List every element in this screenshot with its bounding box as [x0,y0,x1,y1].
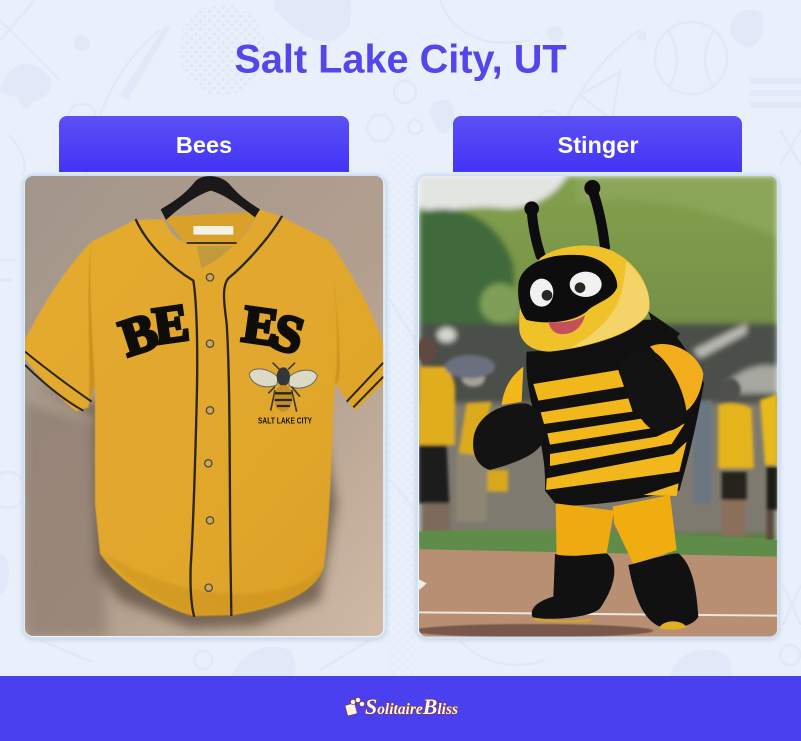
jersey lettering: E [150,294,192,356]
mascot [473,180,704,630]
photo: Bees jersey on hanger [25,176,383,636]
lowered arm [473,403,546,470]
photo: Stinger mascot on the field [413,176,777,637]
footer bar [0,676,801,741]
jersey lettering [116,304,304,358]
eyes [530,279,553,307]
tab: Stinger: Stinger [558,132,638,158]
bee emblem [249,363,317,412]
antennae [532,189,605,256]
jersey lettering: S [266,302,310,366]
raised arm [619,351,687,432]
buttons [205,274,214,591]
blurred spectators [417,337,777,543]
shorts [556,503,614,558]
mouth [548,315,585,334]
tab: Bees [59,116,349,172]
chalk line and base [419,612,777,616]
boots [532,553,614,619]
hanger [161,176,260,220]
jersey lettering: E [239,295,282,357]
right sleeve stripes [347,363,383,407]
fabric shading [88,242,95,407]
torso stripes [533,370,687,496]
footer logo: SolitaireBliss [345,694,458,719]
head [519,245,649,352]
wall backdrop [25,176,383,636]
tab: Bees: Bees [176,132,232,158]
emblem caption: SALT LAKE CITY [258,417,313,426]
title: Salt Lake City, UT [234,38,567,82]
tab: Stinger [453,116,742,172]
outfield grass [419,530,777,558]
card frame: jersey [24,175,386,638]
logo cards icon [345,697,365,716]
piping and placket [136,217,282,616]
card frame: mascot [417,175,779,638]
wall shade lower left [25,403,107,636]
torso [526,320,704,506]
face mask [518,255,617,322]
blurred park background [419,176,777,543]
ground shadow [413,624,653,637]
jersey inside back neck [163,212,260,245]
dirt infield [419,549,777,637]
wing [648,312,680,338]
jersey lettering: B [113,302,164,368]
logo wordmark: SolitaireBliss [365,694,458,719]
left sleeve stripes [25,352,92,411]
shoulder pads [650,344,703,412]
jersey cast shadow [33,383,337,628]
jersey body [25,209,383,616]
collar back band and tag [186,242,237,244]
